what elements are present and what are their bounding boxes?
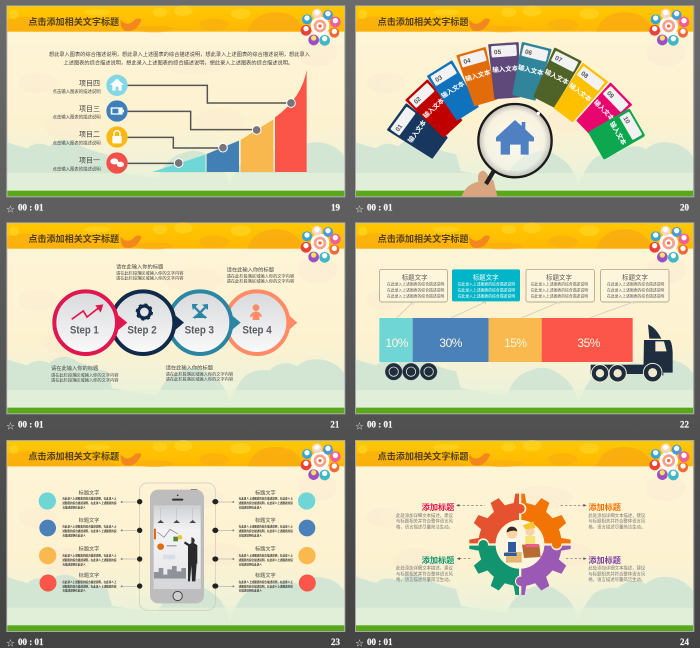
- left item text: 标题文字: [79, 488, 99, 496]
- left item text: 在此录入上述图表的综合描述说明，在此录入上: [62, 580, 117, 584]
- card 09: 09: [605, 90, 615, 100]
- box 3: 标题文字: [546, 272, 572, 281]
- right item text: [239, 488, 293, 593]
- callout top-right: [561, 502, 646, 530]
- left item text: 合描述说明在此录入: [62, 589, 86, 593]
- callout bottom-right: 此处添加详细文本描述，建议: [588, 565, 646, 572]
- gear piece: orange: [521, 494, 571, 544]
- slide background: [7, 223, 344, 413]
- slide 24: four-piece gear diagram: [355, 440, 694, 648]
- right item text: 在此录入上述图表的综合描述说明，在此录入上: [239, 580, 293, 584]
- slide 21: four step circles: [6, 222, 345, 432]
- right item text: 述图表的综合描述说明，在此录入上述图表的综: [239, 529, 293, 533]
- trailer wheels: [385, 363, 437, 380]
- footer: ☆: [6, 204, 15, 215]
- card 07: [531, 49, 581, 108]
- footer: 21: [330, 420, 340, 430]
- title: 点击添加相关文字标题: [378, 450, 468, 461]
- title: 点击添加相关文字标题: [378, 16, 468, 27]
- step 1 text block: 请在此栏段落区域输入你的文字内容: [51, 371, 119, 378]
- truck trailer bar chart: 35%: [577, 336, 601, 350]
- footer: 00 : 01: [18, 420, 44, 430]
- card 03: [428, 62, 479, 120]
- step 1 text block: 请在此输入你的标题: [51, 364, 99, 372]
- item labels: 点击输入图表的描述说明: [53, 139, 101, 146]
- card 06: [510, 43, 551, 100]
- slide background: [356, 6, 693, 196]
- box 4: 标题文字: [622, 272, 648, 281]
- slide frame: [355, 440, 694, 632]
- step 3 text block: 请在此栏段落区域输入你的文字内容: [166, 376, 234, 383]
- title: 点击添加相关文字标题: [28, 16, 119, 27]
- left item text: 在此录入上述图表的综合描述说明，在此录入上: [62, 554, 117, 558]
- gear piece: green: [469, 546, 519, 595]
- right item circles: [298, 492, 316, 591]
- step 4 text block: 请在此栏段落区域输入你的文字内容: [227, 273, 295, 280]
- icon: battery: [106, 100, 128, 122]
- card 07: 输入文本: [543, 67, 571, 87]
- footer: [355, 203, 690, 215]
- callout bottom-left: 格，语言描述尽量简洁生动。: [396, 576, 453, 583]
- slide background: [7, 440, 344, 631]
- step 1 text block: 请在此栏段落区域输入你的文字内容: [51, 376, 119, 383]
- card 01: 输入文本: [406, 118, 428, 144]
- step 3 text block: [166, 363, 234, 383]
- card 08: [552, 64, 607, 123]
- card 04: 04: [463, 57, 472, 66]
- left item circles: [39, 492, 56, 591]
- magnifier with house icon: [462, 104, 552, 197]
- left item text: 在此录入上述图表的综合描述说明，在此录入上: [62, 525, 117, 529]
- item labels: 项目四: [79, 80, 100, 88]
- callout bottom-left: 添加标题: [422, 555, 454, 565]
- slide frame: [6, 440, 345, 632]
- callout top-left: 添加标题: [422, 502, 454, 512]
- footer: 00 : 01: [367, 420, 393, 430]
- footer: [355, 420, 690, 432]
- slide 19: staircase growth chart: [6, 5, 345, 215]
- card 06: 输入文本: [517, 62, 545, 78]
- box 2 highlighted: 在此录入上述图表的综合描述说明: [458, 282, 515, 287]
- item labels: 项目二: [79, 131, 100, 139]
- right item text: 标题文字: [255, 488, 276, 496]
- callout top-right: 格，语言描述尽量简洁生动。: [588, 523, 645, 530]
- icon: house: [106, 75, 128, 96]
- step 1: Step 1: [70, 324, 99, 336]
- left item text: 述图表的综合描述说明，在此录入上述图表的综: [62, 529, 117, 533]
- card 04: 输入文本: [464, 67, 492, 83]
- card 01: 01: [394, 123, 404, 133]
- gear piece: purple: [521, 546, 571, 595]
- callout top-right: 添加标题: [588, 502, 621, 512]
- box 1: [380, 269, 447, 302]
- card 08: 08: [579, 70, 590, 80]
- center illustration: kids on boxes: [496, 520, 544, 569]
- slide background: [356, 440, 693, 631]
- truck trailer bar chart: [379, 318, 633, 362]
- box 4: 在此录入上述图表的综合描述说明: [607, 288, 665, 293]
- truck trailer bar chart: 15%: [504, 336, 527, 350]
- truck cab: [591, 324, 673, 382]
- right item text: 合描述说明在此录入: [239, 505, 262, 509]
- card 04: [457, 48, 499, 106]
- callout bottom-left: [396, 555, 472, 583]
- box 1: 在此录入上述图表的综合描述说明: [387, 282, 445, 287]
- right item text: 在此录入上述图表的综合描述说明，在此录入上: [239, 497, 293, 501]
- footer: ☆: [355, 204, 364, 215]
- step 2: Step 2: [127, 324, 157, 336]
- step 4: Step 4: [242, 324, 272, 336]
- title: 点击添加相关文字标题: [28, 450, 119, 461]
- footer: 20: [680, 203, 690, 213]
- step 1 text block: [51, 364, 119, 383]
- box 1: 标题文字: [402, 272, 428, 281]
- slide background: [356, 223, 693, 413]
- footer: 19: [331, 203, 341, 213]
- gear puzzle knobs: [478, 503, 562, 587]
- slide 20: fan of cards with magnifier: [355, 5, 694, 215]
- left item text: 标题文字: [79, 545, 99, 553]
- card 02: 输入文本: [421, 96, 446, 120]
- truck trailer bar chart: 10%: [385, 336, 409, 350]
- card 10: [589, 109, 645, 159]
- callout bottom-right: 与标题相关并符合整体语言风: [588, 570, 646, 577]
- slide background: [7, 6, 344, 196]
- card 03: 输入文本: [439, 78, 467, 100]
- connectors and dots: [121, 499, 234, 589]
- card 07: 07: [554, 55, 563, 64]
- item labels: 项目三: [79, 105, 100, 113]
- right item text: 述图表的综合描述说明，在此录入上述图表的综: [239, 558, 293, 562]
- footer: ☆: [6, 421, 15, 432]
- callout top-left: 格，语言描述尽量简洁生动。: [396, 523, 453, 530]
- step 4 text block: 请在此输入你的标题: [227, 265, 275, 273]
- footer: 00 : 01: [367, 203, 393, 213]
- box 3: [526, 269, 594, 302]
- right item text: 合描述说明在此录入: [239, 562, 262, 566]
- callout bottom-right: 添加标题: [588, 555, 621, 565]
- step 2 text block: [116, 262, 184, 282]
- left item text: 合描述说明在此录入: [62, 533, 86, 537]
- box 2 highlighted: [452, 269, 520, 301]
- footer: [6, 203, 341, 215]
- phone outline frame: [139, 483, 215, 610]
- card 01: [388, 104, 449, 160]
- intro paragraph: [49, 50, 311, 66]
- callout top-left: [396, 502, 485, 530]
- card 10: 10: [621, 115, 631, 125]
- connector arrows: [397, 302, 634, 318]
- item labels: 点击输入图表的描述说明: [53, 114, 101, 121]
- step 1: [54, 291, 127, 354]
- left item text: 标题文字: [79, 516, 99, 524]
- card 02: [406, 81, 463, 138]
- box 1: 在此录入上述图表的综合描述说明: [387, 288, 445, 293]
- footer: 24: [680, 637, 690, 647]
- box 2 highlighted: 标题文字: [473, 272, 499, 281]
- card 06: 06: [524, 49, 533, 57]
- step 3: Step 3: [185, 324, 214, 336]
- gear piece: red: [469, 494, 519, 544]
- truck trailer bar chart: 30%: [439, 336, 463, 350]
- right item text: 合描述说明在此录入: [239, 589, 262, 593]
- box 3: 在此录入上述图表的综合描述说明: [531, 282, 588, 287]
- card 03: 03: [434, 74, 444, 84]
- box 4: [601, 269, 669, 302]
- card 05: [489, 43, 521, 98]
- slide frame: [6, 222, 345, 414]
- left item text: 标题文字: [79, 571, 99, 579]
- slide 22: truck percentage chart: [355, 222, 694, 432]
- item labels: 项目一: [79, 157, 100, 165]
- item labels: 点击输入图表的描述说明: [53, 165, 101, 172]
- title: 点击添加相关文字标题: [378, 233, 468, 244]
- callout bottom-right: [566, 555, 646, 583]
- icon: chat: [106, 152, 128, 174]
- item labels: [53, 80, 101, 172]
- phone: [150, 489, 204, 603]
- title: 点击添加相关文字标题: [28, 233, 119, 244]
- slide 23: phone with side items: [6, 440, 345, 648]
- icon: lock: [106, 126, 128, 148]
- intro paragraph: 上述图表的综合描述说明，想此录入上述图表的综合描述说明，想此录入上述图表的综合描述说明。: [64, 58, 293, 66]
- item labels: 点击输入图表的描述说明: [53, 88, 101, 95]
- staircase area chart: [152, 70, 307, 172]
- step 3 text block: 请在此栏段落区域输入你的文字内容: [166, 371, 234, 378]
- footer: 22: [680, 420, 690, 430]
- step 2 text block: 请在此栏段落区域输入你的文字内容: [116, 270, 184, 277]
- slide frame: [355, 5, 694, 197]
- callout top-left: 与标题相关并符合整体语言风: [396, 518, 453, 525]
- right item text: 述图表的综合描述说明，在此录入上述图表的综: [239, 501, 293, 505]
- card 05: 输入文本: [492, 63, 519, 74]
- step 4 text block: 请在此栏段落区域输入你的文字内容: [227, 278, 295, 285]
- right item text: 标题文字: [255, 571, 276, 579]
- right item text: 述图表的综合描述说明，在此录入上述图表的综: [239, 584, 293, 588]
- footer: 00 : 01: [367, 637, 393, 647]
- connector lines: [128, 85, 291, 163]
- left item text: [62, 488, 117, 593]
- step 2 text block: 请在此栏段落区域输入你的文字内容: [116, 275, 184, 282]
- step 2: [112, 291, 184, 354]
- step 4: [226, 291, 297, 354]
- left item text: 合描述说明在此录入: [62, 562, 86, 566]
- step 2 text block: 请在此输入你的标题: [116, 262, 164, 270]
- slide frame: [355, 222, 694, 414]
- box 2 highlighted: 在此录入上述图表的综合描述说明: [458, 293, 515, 298]
- card 09: [575, 84, 631, 139]
- step 3 text block: 请在此输入你的标题: [166, 363, 214, 371]
- right item text: 在此录入上述图表的综合描述说明，在此录入上: [239, 525, 293, 529]
- right item text: 标题文字: [255, 545, 276, 553]
- step 3: [169, 291, 241, 354]
- footer: ☆: [355, 421, 364, 432]
- step 4 text block: [227, 265, 295, 285]
- callout top-left: 此处添加详细文本描述，建议: [396, 512, 453, 519]
- right item text: 合描述说明在此录入: [239, 533, 262, 537]
- box 4: 在此录入上述图表的综合描述说明: [607, 282, 665, 287]
- footer: 23: [331, 637, 341, 647]
- footer: [6, 637, 341, 648]
- callout bottom-left: 此处添加详细文本描述，建议: [396, 565, 453, 572]
- left item text: 述图表的综合描述说明，在此录入上述图表的综: [62, 501, 117, 505]
- callout bottom-left: 与标题相关并符合整体语言风: [396, 570, 453, 577]
- card 09: 输入文本: [592, 98, 617, 123]
- footer: 00 : 01: [18, 203, 44, 213]
- box 4: 在此录入上述图表的综合描述说明: [607, 293, 665, 298]
- footer: [6, 420, 340, 432]
- card 08: 输入文本: [567, 81, 594, 104]
- box 3: 在此录入上述图表的综合描述说明: [531, 293, 588, 298]
- right item text: 标题文字: [255, 516, 276, 524]
- callout bottom-right: 格，语言描述尽量简洁生动。: [588, 576, 645, 583]
- footer: 00 : 01: [18, 637, 44, 647]
- left item text: 述图表的综合描述说明，在此录入上述图表的综: [62, 584, 117, 588]
- box 3: 在此录入上述图表的综合描述说明: [531, 288, 588, 293]
- left item text: 在此录入上述图表的综合描述说明，在此录入上: [62, 497, 117, 501]
- intro paragraph: 想此录入图表的综合描述说明，想此录入上述图表的综合描述说明，想此录入上述图表的综合描述说明，想此录入: [49, 50, 311, 58]
- card 02: 02: [413, 95, 423, 106]
- footer: [355, 637, 690, 648]
- callout top-right: 与标题相关并符合整体语言风: [588, 518, 646, 525]
- card 10: 输入文本: [608, 120, 629, 147]
- left item text: 合描述说明在此录入: [62, 505, 86, 509]
- callout top-right: 此处添加详细文本描述，建议: [588, 512, 646, 519]
- chart markers: [174, 99, 295, 167]
- card 05: 05: [494, 49, 502, 56]
- box 1: 在此录入上述图表的综合描述说明: [387, 293, 445, 298]
- left item text: 述图表的综合描述说明，在此录入上述图表的综: [62, 558, 117, 562]
- right item text: 在此录入上述图表的综合描述说明，在此录入上: [239, 554, 293, 558]
- box 2 highlighted: 在此录入上述图表的综合描述说明: [458, 288, 515, 293]
- slide frame: [6, 5, 345, 197]
